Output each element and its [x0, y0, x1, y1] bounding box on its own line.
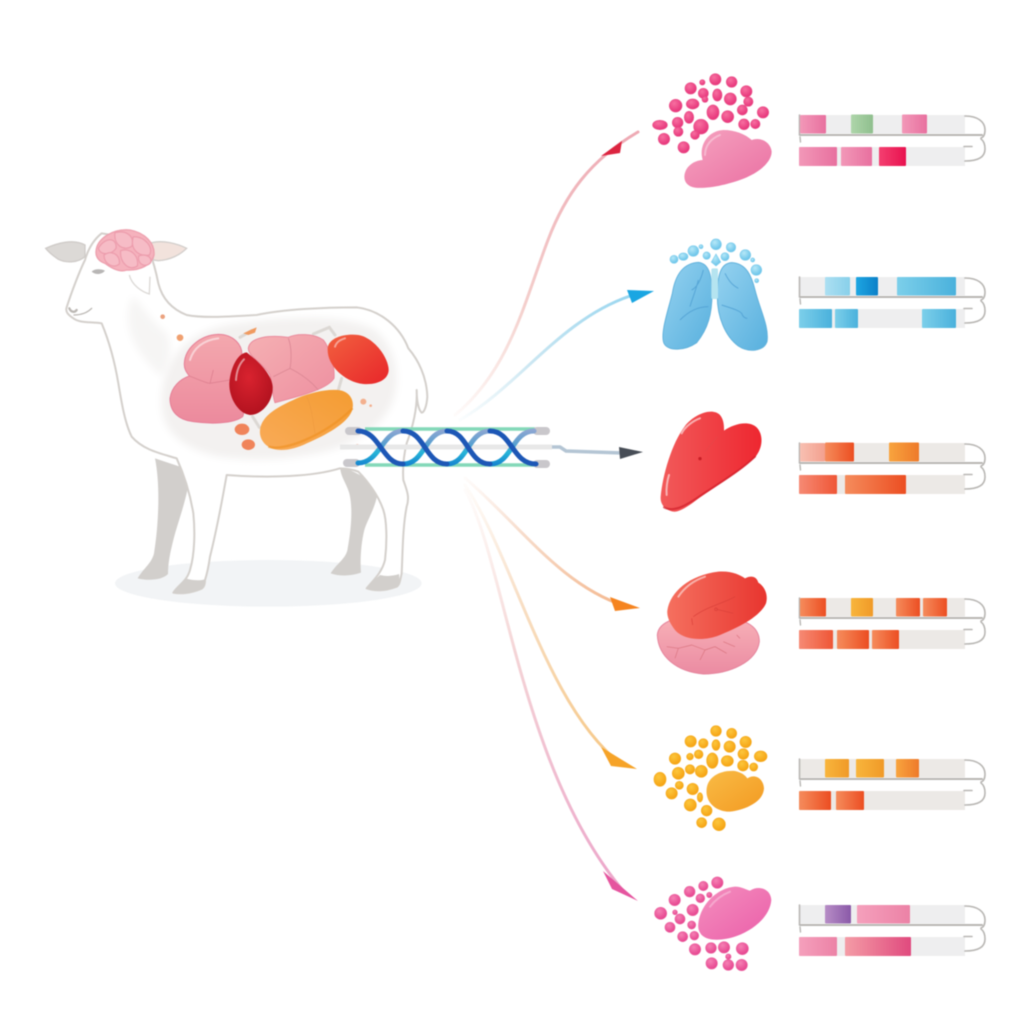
- arrow: to pink organ top: [455, 132, 638, 415]
- sheep illustration: [46, 230, 427, 607]
- sheep body: [66, 233, 427, 593]
- tracks: [799, 115, 965, 166]
- organ: dark red heart: [229, 352, 273, 415]
- particles: [653, 74, 769, 153]
- expression strip 1: [799, 114, 985, 166]
- central axis: [340, 444, 552, 450]
- arrow: to liver lobes: [465, 478, 640, 611]
- arrow: to pink organ bottom: [465, 490, 638, 901]
- particles: [654, 726, 767, 831]
- left lung: [663, 262, 712, 349]
- eye: [92, 269, 105, 274]
- tracks: [799, 905, 965, 956]
- tracks: [799, 759, 965, 810]
- fat deposits: [160, 314, 372, 450]
- body cavity: [162, 318, 397, 459]
- organ group 3: heart: [661, 412, 762, 512]
- cracks: [667, 635, 740, 660]
- segments: [799, 759, 919, 810]
- nose and mouth: [69, 308, 92, 315]
- heart shape: [661, 412, 762, 512]
- organ group 6: magenta organ with particles: [655, 877, 771, 971]
- ear right: [152, 242, 187, 261]
- arrow: to lungs: [460, 290, 654, 420]
- highlight: [705, 135, 720, 155]
- right lung: [717, 263, 767, 350]
- pink base lobe: [657, 616, 759, 674]
- tracks: [799, 277, 965, 328]
- highlight: [678, 577, 705, 597]
- segments: [799, 598, 947, 649]
- tracks: [799, 598, 965, 649]
- highlight: [710, 892, 730, 907]
- dimple: [705, 437, 717, 452]
- end caps: [347, 431, 546, 464]
- connector: [800, 443, 985, 489]
- expression strip 2: [799, 277, 985, 328]
- highlights: [666, 418, 700, 495]
- arrow: to yellow organ: [465, 485, 637, 769]
- segments: [799, 442, 919, 494]
- connector: [800, 759, 985, 805]
- organ: center lobe: [248, 335, 334, 403]
- ear flap: [129, 272, 150, 294]
- expression strip 3: [799, 442, 985, 494]
- airways: [680, 270, 747, 320]
- expression strip 5: [799, 759, 985, 810]
- ear left: [46, 242, 85, 262]
- connector: [800, 905, 985, 951]
- ground shadow: [115, 560, 422, 607]
- particles: [655, 877, 748, 971]
- organ group 5: yellow organ with particles: [654, 726, 767, 831]
- ascending strand pieces: [358, 431, 534, 464]
- tracks: [799, 443, 965, 494]
- green rails: [365, 429, 535, 465]
- brain: [96, 230, 154, 271]
- connector: [800, 277, 985, 323]
- neck shading: [128, 297, 170, 377]
- segments: [799, 114, 927, 166]
- organ group 4: liver lobes: [657, 572, 767, 674]
- segments: [799, 277, 956, 328]
- expression strip 4: [799, 598, 985, 649]
- descending strand pieces: [358, 431, 536, 464]
- organ: [684, 130, 772, 188]
- organ: red lobe: [328, 335, 389, 384]
- far front leg: [138, 458, 190, 580]
- connective tubes: [240, 327, 342, 427]
- organ group 2: lungs with droplets: [663, 239, 767, 350]
- segments: [799, 905, 911, 956]
- connector: [800, 115, 985, 161]
- DNA helix: [340, 429, 643, 465]
- trachea: [711, 268, 718, 299]
- expression strip 6: [799, 905, 985, 956]
- organ: [706, 771, 764, 812]
- organ: orange lobe: [260, 390, 353, 450]
- lower edge shading: [664, 457, 755, 509]
- organ: [698, 887, 771, 940]
- surface lines: [692, 597, 735, 625]
- organ group 1: pink organ with particles: [653, 74, 772, 188]
- red top lobe: [667, 572, 767, 639]
- arrow: to heart: [552, 447, 643, 459]
- droplets: [670, 239, 762, 283]
- hooves: [173, 574, 399, 593]
- far back leg: [331, 465, 377, 575]
- organ: left lung: [170, 334, 244, 423]
- connector: [800, 598, 985, 644]
- ear flap edge: [129, 275, 150, 294]
